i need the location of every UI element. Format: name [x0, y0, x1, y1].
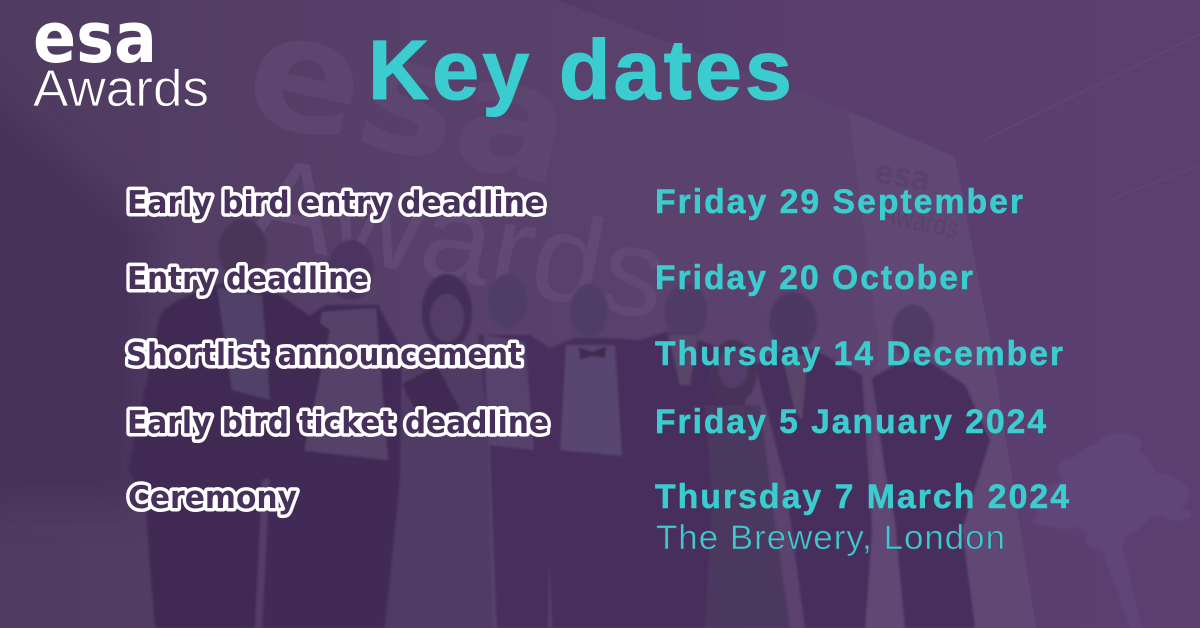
ceiling light lines — [985, 34, 1200, 200]
date: 14 December: Thursday 14 December — [655, 335, 1065, 373]
person 1 — [128, 219, 330, 628]
person 3 woman in pale gown — [386, 274, 492, 628]
date: 20 October: Friday 20 October — [655, 259, 975, 297]
date: 5 January: Friday 5 January 2024 — [655, 403, 1048, 441]
labels column — [126, 185, 549, 516]
dates column — [655, 183, 1071, 557]
flower arrangement — [1033, 433, 1192, 628]
person 6 — [625, 284, 745, 628]
person 2 — [262, 240, 402, 628]
title: Key dates — [368, 23, 795, 117]
photo of winners: silhouettes — [128, 219, 990, 628]
venue: The Brewery, London — [656, 519, 1006, 557]
label: ceremony: Ceremony — [128, 480, 297, 516]
side banner — [849, 112, 1036, 628]
person 5 — [545, 284, 640, 628]
date: 29 September: Friday 29 September — [655, 183, 1025, 221]
label: early bird ticket: Early bird ticket deadline — [127, 405, 549, 441]
label: early bird entry: Early bird entry deadline — [127, 185, 545, 221]
person 8 — [755, 292, 872, 628]
logo — [33, 0, 209, 118]
person 9 — [872, 305, 990, 628]
ghost Awards lettering on backdrop: Awards — [240, 130, 679, 347]
person 7 woman in patterned dress — [705, 340, 790, 628]
label: entry deadline: Entry deadline — [127, 261, 369, 297]
label: shortlist: Shortlist announcement — [126, 337, 522, 373]
logo word Awards: Awards — [33, 60, 209, 118]
dark left wall — [0, 70, 150, 505]
person 4 — [478, 274, 552, 628]
ghost Awards on side banner: Awards — [879, 198, 961, 244]
ghost logo on side banner: esa — [871, 151, 934, 201]
date: 7 March: Thursday 7 March 2024 — [655, 478, 1071, 516]
